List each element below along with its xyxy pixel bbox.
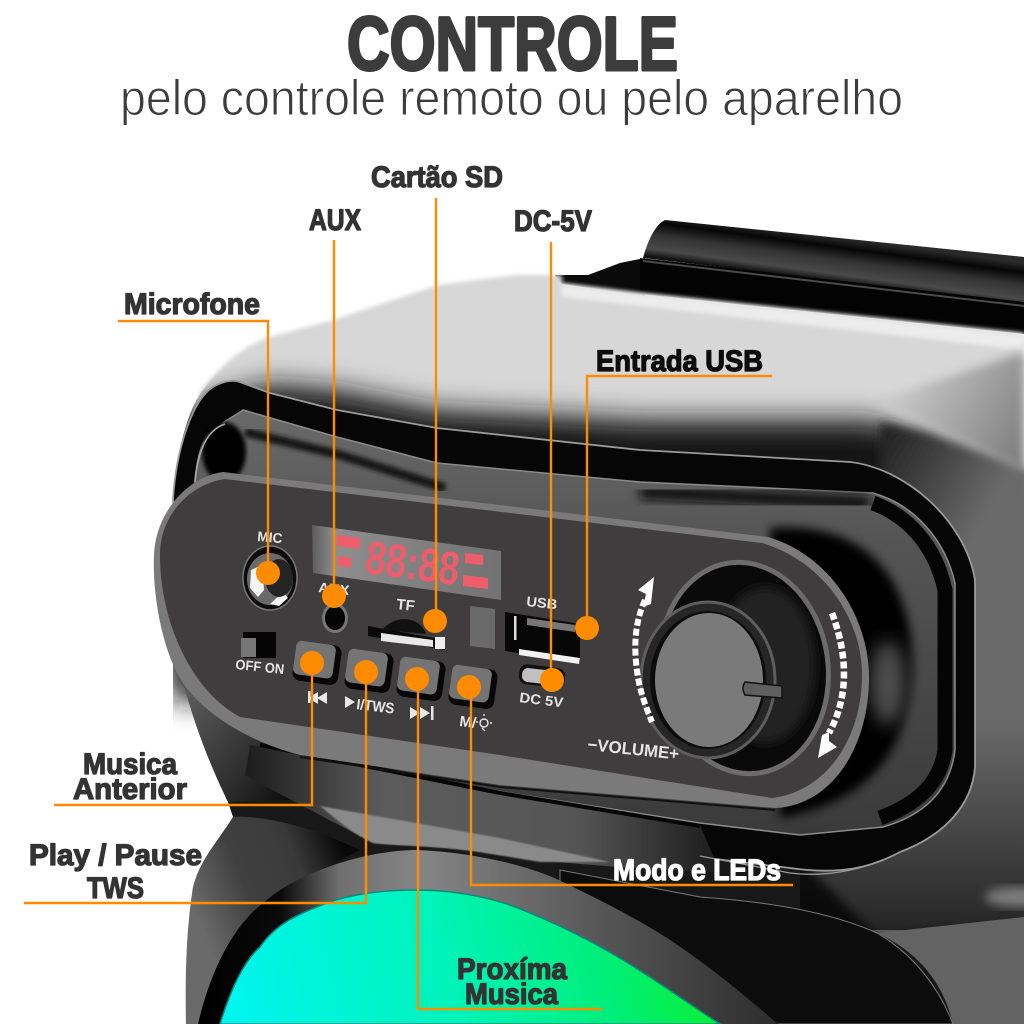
lower bracket (186, 817, 360, 1024)
MIC jack (243, 546, 297, 610)
marker dots (256, 561, 599, 699)
label: Play / Pause TWS: TWS (87, 872, 144, 905)
panel printed labels: DC 5V (519, 689, 565, 710)
label: Play / Pause TWS: Play / Pause (29, 839, 202, 872)
handle hinge (555, 258, 645, 296)
panel printed labels: OFF ON (235, 656, 285, 677)
bay left lobe edge (195, 424, 225, 482)
label: Cartão SD: Cartão SD (371, 161, 503, 194)
label: Play / Pause TWS (29, 839, 202, 905)
carry handle (643, 220, 1024, 302)
dark streak (245, 432, 445, 488)
label: Proxima Musica (457, 953, 567, 1011)
body backing (173, 500, 1024, 1024)
panel printed labels: M/ (459, 713, 478, 732)
label: Musica Anterior: Anterior (73, 773, 187, 806)
panel printed labels: USB (526, 593, 558, 612)
black crease (260, 745, 700, 826)
label: Proxima Musica: Musica (465, 978, 558, 1011)
right side of body (800, 422, 1024, 936)
black cavity right of panel (770, 527, 912, 818)
left segments (337, 535, 360, 568)
volume knob (641, 551, 842, 785)
display (312, 525, 501, 600)
leader line: Proxima Musica (418, 679, 602, 1009)
neck below panel (180, 650, 350, 802)
cavity highlight (870, 641, 906, 725)
title: CONTROLE (347, 2, 678, 87)
digits: 88:88 (363, 530, 463, 595)
panel printed labels (235, 528, 680, 764)
control panel face (160, 479, 862, 798)
panel printed labels: −VOLUME+ (587, 735, 680, 764)
bay left lobe (202, 422, 246, 482)
lower right highlight line (700, 852, 900, 874)
DC port (518, 663, 566, 689)
IR window (470, 606, 495, 649)
right facet (873, 352, 1024, 470)
top face highlight (562, 285, 1024, 350)
media icons (308, 691, 434, 720)
right side lower shade (800, 720, 1024, 930)
buttons (291, 640, 499, 710)
leader line: Play Pause (24, 672, 366, 903)
gray band under panel (245, 745, 720, 872)
label: DC-5V: DC-5V (514, 205, 592, 238)
band highlight (320, 806, 610, 862)
speaker (154, 220, 1024, 1024)
knob pointer (743, 682, 782, 698)
dark shell below top face (170, 384, 1024, 700)
leader line: Entrada USB (587, 376, 772, 628)
top face (200, 275, 1024, 480)
upper inner shadow (640, 492, 870, 503)
label: Entrada USB: Entrada USB (596, 345, 763, 378)
panel printed labels: AUX (318, 579, 351, 598)
USB port (505, 612, 580, 664)
lower right gray panel (877, 917, 1024, 1024)
label: Microfone: Microfone (124, 288, 260, 321)
leader line: Microfone (118, 321, 268, 573)
panel printed labels: I/TWS (356, 696, 395, 718)
bay inner surface (190, 410, 955, 835)
bulb icon (476, 714, 492, 731)
AUX jack (322, 603, 348, 633)
right segments (463, 553, 488, 589)
handle slot (640, 258, 1024, 334)
control bay (173, 381, 975, 871)
label: Musica Anterior (73, 748, 187, 806)
bay inner black strip (873, 503, 945, 818)
label: AUX: AUX (309, 204, 361, 237)
grille ring (198, 850, 778, 1024)
rim underside shade (300, 757, 775, 810)
label: Musica Anterior: Musica (83, 748, 177, 781)
panel rim (154, 472, 869, 808)
panel printed labels: MIC (257, 528, 283, 546)
grille housing (560, 870, 953, 1024)
handle ridge (643, 261, 1024, 306)
label: Proxima Musica: Proxíma (457, 953, 567, 986)
panel printed labels: TF (396, 596, 416, 615)
TF slot (368, 619, 445, 650)
label: Modo e LEDs: Modo e LEDs (613, 854, 781, 887)
leader line: Cartão SD (435, 198, 437, 621)
leader line: DC-5V (550, 242, 552, 680)
power switch (241, 632, 276, 658)
leader line: Musica Anterior (54, 663, 312, 805)
right soft highlight (985, 887, 1024, 907)
volume arrows (635, 577, 844, 758)
green LED light (220, 890, 720, 1024)
leader line: Modo e LEDs (471, 687, 793, 885)
leader line: AUX (333, 240, 335, 596)
subtitle: pelo controle remoto ou pelo aparelho (120, 70, 903, 126)
